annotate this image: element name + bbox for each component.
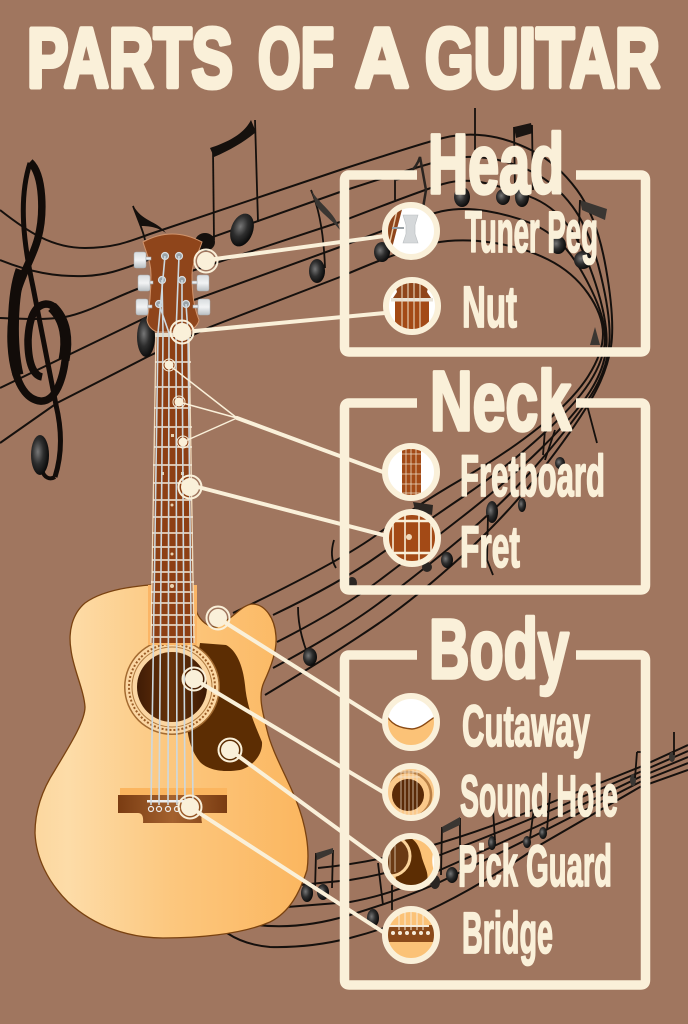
guitar head [143,234,202,332]
nut [155,333,191,337]
music notes [133,108,675,927]
tuner pegs [134,252,210,315]
icon: nut [385,278,439,335]
title: PARTS [27,11,233,105]
guitar body [35,585,308,938]
lower music staff [227,745,688,947]
heading: body: Body [429,602,569,696]
treble clef [11,162,66,478]
frets [151,362,195,637]
icon: fretboard [384,444,438,500]
icon: sound hole [384,765,438,819]
title: OF [258,11,334,105]
heading: neck: Neck [430,354,571,448]
markers on guitar [163,250,242,818]
strings [151,256,193,805]
icon: cutaway [380,695,442,752]
main music staff [0,135,612,695]
panel: body: Bridge [462,901,553,966]
icon: fret [385,510,440,566]
inlay dots [161,434,184,588]
icon: bridge [384,908,438,962]
panel: neck [344,354,646,590]
panel: body [344,602,646,985]
title: A [355,11,409,105]
rosette and sound hole [124,639,220,735]
title [27,11,660,105]
icon: tuner peg [384,202,438,258]
label: nut: Nut [462,275,517,340]
icon: pick guard [382,833,440,891]
heading: head: Head [428,117,564,211]
leader lines [169,236,385,932]
bridge [118,788,227,823]
guitar [35,234,308,938]
panel: head [344,117,646,352]
neck and fretboard [148,585,197,645]
pick guard [187,643,262,771]
label: fret: Fret [460,515,520,580]
